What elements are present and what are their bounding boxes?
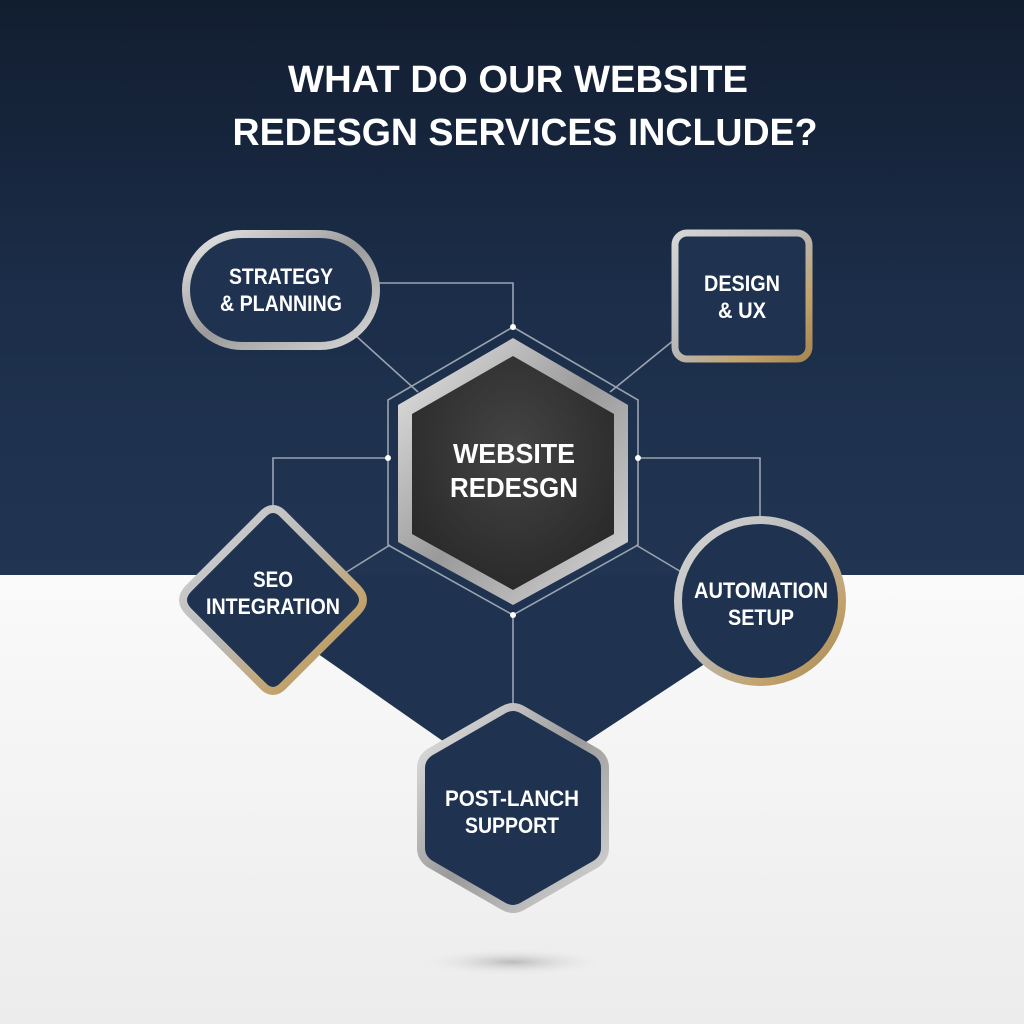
central hexagon: website redesign: REDESGN	[450, 472, 578, 503]
node: automation setup: SETUP	[728, 605, 794, 630]
node: post-launch support: POST-LANCH	[445, 786, 579, 811]
node: design & ux: & UX	[718, 298, 766, 323]
node: post-launch support: SUPPORT	[465, 813, 559, 838]
node: automation setup	[678, 520, 842, 682]
node: design & ux: DESIGN	[704, 271, 780, 296]
node: post-launch support	[421, 707, 605, 909]
central hexagon: website redesign	[385, 324, 641, 618]
node: seo integration: SEO	[253, 567, 293, 592]
node: strategy & planning: & PLANNING	[220, 291, 342, 316]
node: seo integration: INTEGRATION	[206, 594, 340, 619]
central hexagon: website redesign: WEBSITE	[453, 438, 575, 469]
node: automation setup: AUTOMATION	[694, 578, 828, 603]
connector lines	[273, 283, 760, 706]
node: seo integration	[183, 509, 363, 691]
node: strategy & planning	[186, 234, 376, 346]
title: REDESGN SERVICES INCLUDE?	[232, 112, 818, 154]
node: strategy & planning: STRATEGY	[229, 264, 333, 289]
node: design & ux	[675, 233, 809, 359]
title: WHAT DO OUR WEBSITE	[288, 59, 748, 101]
title	[232, 59, 818, 154]
